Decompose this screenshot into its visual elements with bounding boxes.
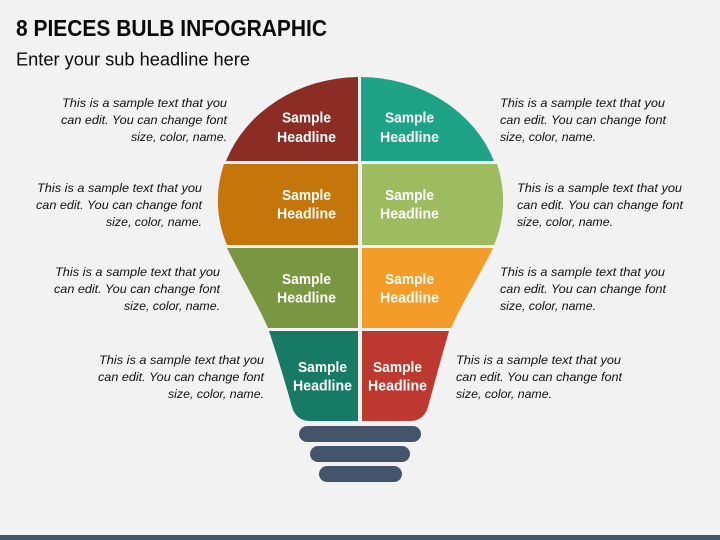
text block: right 1: can edit. You can change font [500,113,667,127]
text block: left 2 [36,181,203,229]
text block: right 2: size, color, name. [517,215,613,229]
footer bar [0,535,720,540]
text block: left 3: This is a sample text that you [55,265,220,279]
text block: right 2: This is a sample text that you [517,181,682,195]
text block: left 2: can edit. You can change font [36,198,203,212]
segment: amber brown [218,164,358,245]
segment: orange: Sample [385,272,434,288]
bulb diagram [218,77,503,482]
segment: orange: Headline [380,291,439,307]
text block: left 3 [54,265,221,313]
segment: maroon: Headline [277,130,336,146]
segment: olive: Sample [282,272,331,288]
text block: left 1: can edit. You can change font [61,113,228,127]
text block: right 1 [500,96,667,144]
segment: amber brown: Headline [277,207,336,223]
text block: right 3: can edit. You can change font [500,282,667,296]
segment: light green: Sample [385,188,434,204]
text block: left 1 [61,96,228,144]
bulb base [299,426,421,482]
text block: right 4: This is a sample text that you [456,353,621,367]
text block: right 4: can edit. You can change font [456,370,623,384]
text block: right 3: This is a sample text that you [500,265,665,279]
segment: light green: Headline [380,207,439,223]
segment: red: Sample [373,360,422,376]
text block: left 3: size, color, name. [124,299,220,313]
text block: left 4: can edit. You can change font [98,370,265,384]
segment: dark teal [269,331,358,421]
text block: left 3: can edit. You can change font [54,282,221,296]
segment: olive [227,248,358,328]
segment: red: Headline [368,379,427,395]
text block: left 2: size, color, name. [106,215,202,229]
text block: left 4: This is a sample text that you [99,353,264,367]
segment: red [362,331,449,421]
segment: teal [361,77,494,161]
text block: right 1: This is a sample text that you [500,96,665,110]
text block: right 4: size, color, name. [456,387,552,401]
subtitle: Enter your sub headline here [16,50,250,70]
segment: maroon [226,77,358,161]
segment: dark teal: Headline [293,379,352,395]
text block: left 4: size, color, name. [168,387,264,401]
text block: left 4 [98,353,265,401]
text block: left 2: This is a sample text that you [37,181,202,195]
text block: right 3 [500,265,667,313]
segment: maroon: Sample [282,111,331,127]
segment: orange [362,248,493,328]
segment: teal: Headline [380,130,439,146]
segment: light green [362,164,503,245]
title: 8 PIECES BULB INFOGRAPHIC [16,15,327,41]
text block: right 3: size, color, name. [500,299,596,313]
segment: olive: Headline [277,291,336,307]
segment: teal: Sample [385,111,434,127]
segment: amber brown: Sample [282,188,331,204]
text block: right 4 [456,353,623,401]
text block: left 1: This is a sample text that you [62,96,227,110]
segment: dark teal: Sample [298,360,347,376]
text block: right 1: size, color, name. [500,130,596,144]
text block: right 2 [517,181,684,229]
text block: left 1: size, color, name. [131,130,227,144]
text block: right 2: can edit. You can change font [517,198,684,212]
